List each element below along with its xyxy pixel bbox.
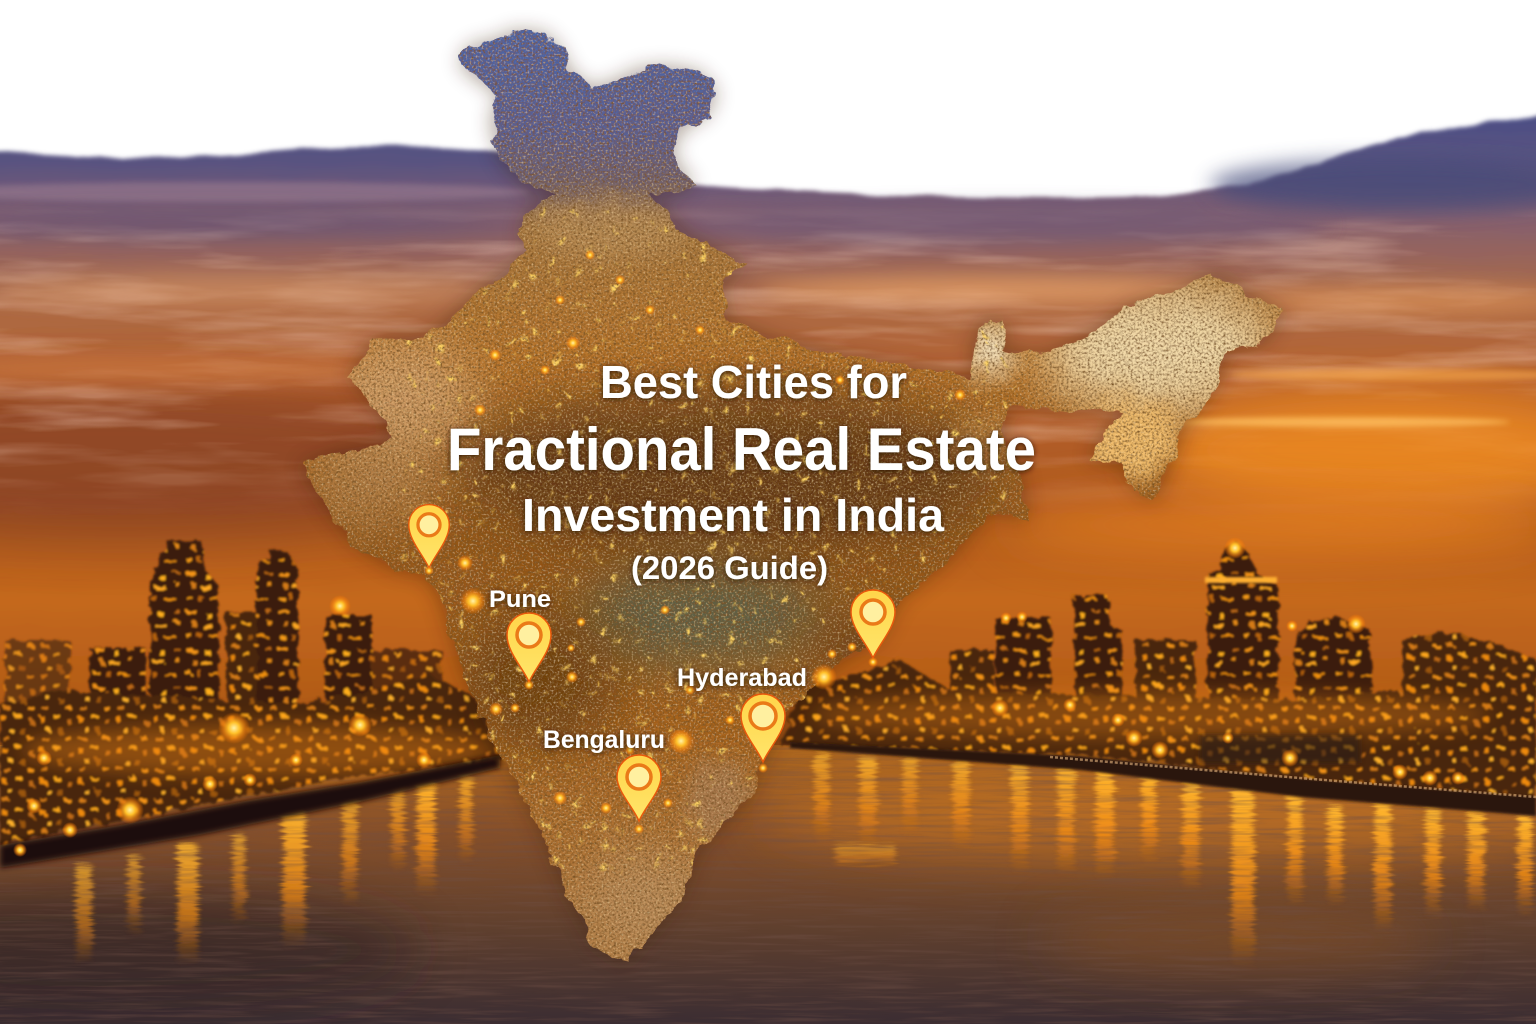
tall tower bbox=[150, 540, 220, 740]
title line 4: (2026 Guide) bbox=[631, 550, 828, 586]
map soft shadow bbox=[300, 30, 1285, 965]
map speckled lights bbox=[400, 210, 1020, 870]
water bbox=[0, 745, 1536, 1024]
map pin: Bengaluru bbox=[617, 755, 661, 834]
tall tower bbox=[1208, 540, 1278, 730]
map pin: Hyderabad bbox=[741, 694, 785, 773]
India map bbox=[280, 20, 1300, 980]
water reflections bbox=[76, 752, 1532, 966]
city label: Pune bbox=[460, 586, 551, 614]
city label: Bengaluru: Bengaluru bbox=[543, 726, 665, 754]
skyline: left bbox=[0, 540, 510, 845]
map pin: Mumbai area bbox=[409, 505, 449, 575]
left city glow band bbox=[0, 595, 500, 868]
map pin: Pune bbox=[507, 613, 551, 690]
city and shoreline lights bbox=[13, 698, 1465, 857]
skyline: right bbox=[780, 540, 1536, 800]
title line 2: Fractional Real Estate bbox=[447, 416, 1036, 483]
water ripple texture bbox=[0, 745, 1536, 1024]
map body bbox=[280, 20, 1300, 980]
right city shore and rooftop lights bbox=[790, 537, 1536, 816]
title line 1: Best Cities for bbox=[600, 356, 907, 408]
city label: Hyderabad: Hyderabad bbox=[677, 664, 807, 692]
map pin: east coast bbox=[851, 590, 895, 667]
sunset sky band bbox=[0, 112, 1536, 800]
title block bbox=[447, 356, 1036, 586]
city label: Pune: Pune bbox=[489, 586, 551, 613]
map city lights bbox=[457, 250, 966, 814]
title line 3: Investment in India bbox=[522, 489, 944, 541]
